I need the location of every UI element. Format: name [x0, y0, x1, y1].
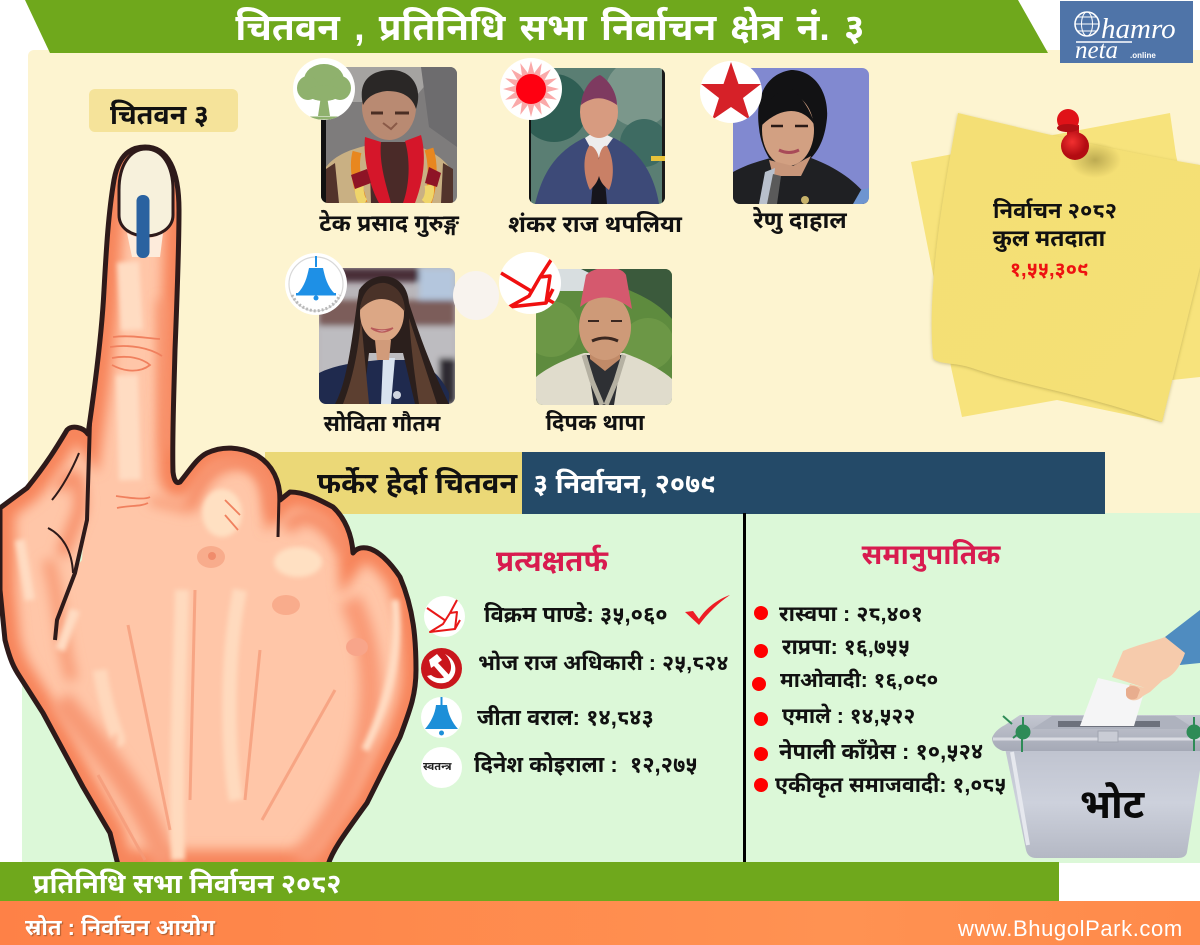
creases [110, 336, 240, 530]
logo: hamro neta [1060, 1, 1193, 63]
decorative pale circle badge [453, 271, 499, 320]
name: Renu Dahal: रेणु दाहाल [753, 207, 847, 233]
candidate row 4: दिनेश कोइराला : १२,२७५ [474, 752, 698, 777]
shading of knuckles and thumb [48, 300, 370, 865]
logo: hamro neta: .online [1130, 51, 1156, 60]
title: चितवन , प्रतिनिधि सभा निर्वाचन क्षेत्र नं. ३ [235, 7, 865, 48]
back sheet [911, 113, 1200, 422]
sleeve [1165, 610, 1200, 665]
name: Tek Prasad Gurung: टेक प्रसाद गुरुङ्ग [319, 210, 459, 236]
sticky note [911, 109, 1200, 424]
hand outline [0, 147, 416, 865]
party row: UML: एमाले : १४,५२२ [782, 704, 915, 728]
footer orange bar [0, 901, 1200, 945]
ballot box label: भोट [1080, 783, 1144, 827]
seals [1003, 716, 1200, 752]
icon: independent: स्वतन्त्र [423, 761, 452, 773]
party row: RSP: रास्वपा : २८,४०१ [779, 601, 923, 626]
photo: Renu Dahal [733, 68, 869, 204]
icon: hammer and sickle [421, 648, 462, 689]
ballot paper [1080, 678, 1145, 726]
party row: Unified Socialist: एकीकृत समाजवादी: १,०८५ [775, 773, 1006, 797]
pin [1057, 109, 1121, 178]
panel: green lower background [22, 513, 1200, 863]
ballot box illustration [992, 610, 1200, 858]
fingernail [119, 149, 173, 236]
badge: plough [499, 252, 561, 314]
band: looking back navy [522, 452, 1105, 514]
party row: Maoist: माओवादी: १६,०९० [780, 669, 938, 692]
name: Shankar Raj Thapaliya: शंकर राज थपलिया [508, 211, 682, 237]
band heading left: फर्केर हेर्दा चितवन [317, 468, 517, 500]
badge: sun [500, 58, 562, 120]
front sheet [932, 113, 1200, 422]
icon: bell [421, 697, 462, 738]
box body [1005, 748, 1200, 858]
icon: plough [424, 596, 465, 637]
thumb gap [76, 528, 84, 568]
party row: Congress: नेपाली काँग्रेस : १०,५२४ [779, 739, 983, 764]
heading: proportional: समानुपातिक [862, 539, 1000, 570]
band heading right: ३ निर्वाचन, २०७९ [533, 469, 715, 499]
bullets: proportional list [752, 606, 768, 792]
note subheading: कुल मतदाता [993, 225, 1105, 251]
constituency label [89, 89, 238, 132]
palm base [8, 222, 406, 856]
candidate row 2: भोज राज अधिकारी : २५,८२४ [478, 650, 728, 675]
box lid [992, 715, 1200, 751]
footer green bar text: प्रतिनिधि सभा निर्वाचन २०८२ [33, 869, 341, 899]
photo: Sobita Gautam [319, 268, 455, 404]
nail base [127, 233, 163, 257]
source: स्रोत : निर्वाचन आयोग [25, 915, 215, 940]
name: Sobita Gautam: सोविता गौतम [324, 411, 440, 436]
party row: RPP: राप्रपा: १६,७५५ [782, 635, 910, 659]
panel: cream upper background [28, 50, 1200, 514]
title banner [25, 0, 1048, 53]
candidate row 1: विक्रम पाण्डे: ३५,०६० [484, 602, 668, 627]
photo: Tek Prasad Gurung [321, 67, 457, 203]
voter hand [1112, 637, 1185, 700]
logo: hamro neta: hamro [1101, 13, 1176, 45]
website: www.BhugolPark.com [958, 916, 1183, 941]
constituency label text: चितवन ३ [110, 100, 209, 130]
ink mark [136, 195, 150, 258]
name: Dipak Thapa: दिपक थापा [546, 410, 644, 435]
badge: bell [285, 253, 347, 315]
divider [743, 513, 746, 862]
footer green bar [0, 862, 1059, 901]
highlights [20, 262, 396, 860]
icon: winner check mark [685, 595, 730, 625]
note total voters: १,५५,३०९ [1010, 259, 1088, 281]
badge: tree [293, 58, 355, 120]
band: looking back gold [265, 452, 523, 514]
photo: Dipak Thapa [536, 269, 672, 405]
knuckle spots [197, 546, 225, 568]
note heading: निर्वाचन २०८२ [993, 198, 1117, 223]
hand illustration [0, 144, 418, 862]
candidate row 3: जीता वराल: १४,८४३ [477, 705, 654, 730]
icon: independent [421, 747, 462, 788]
badge: star [700, 61, 762, 123]
heading: direct: प्रत्यक्षतर्फ [496, 545, 608, 578]
photo: Shankar Raj Thapaliya [529, 68, 665, 204]
tendon lines [98, 590, 335, 860]
